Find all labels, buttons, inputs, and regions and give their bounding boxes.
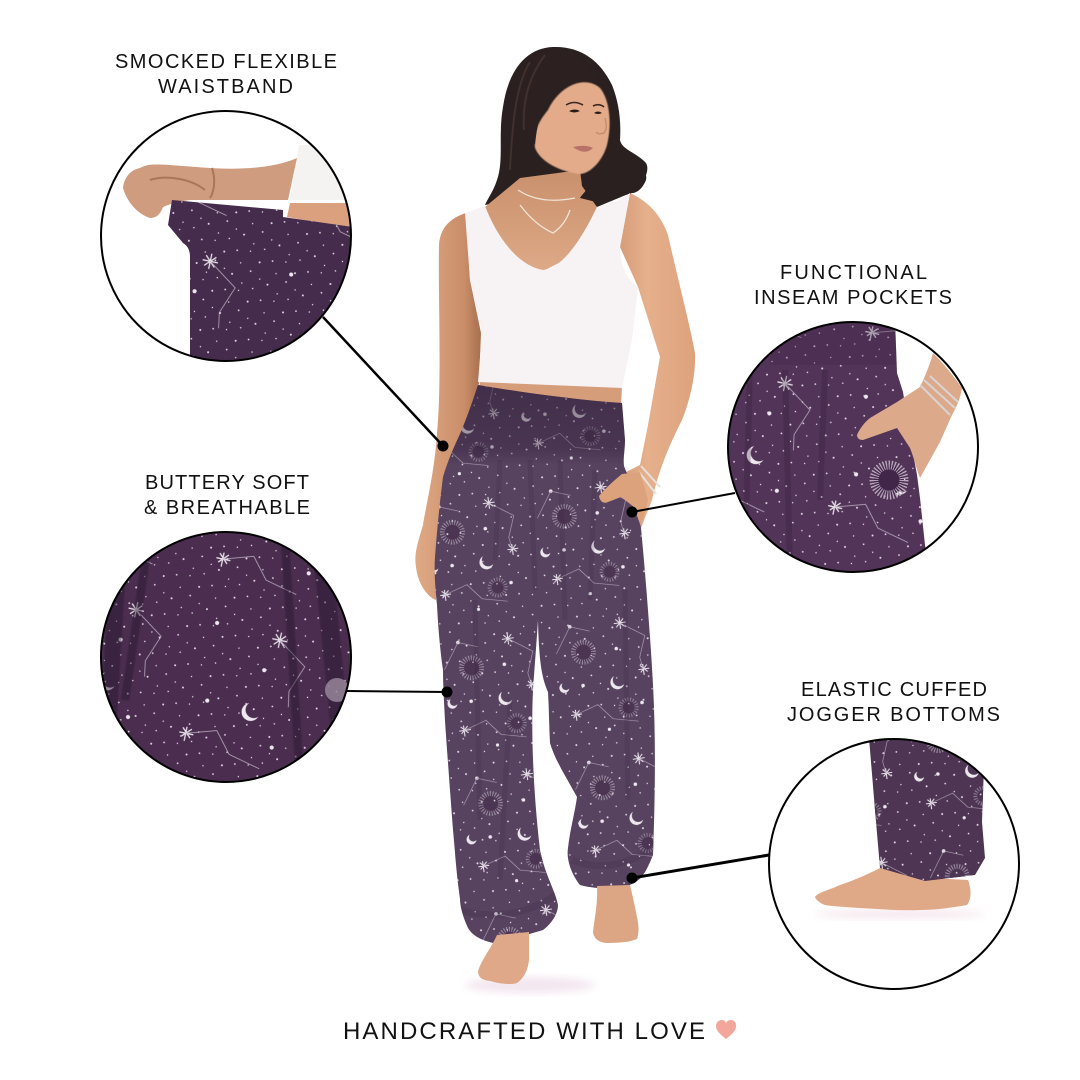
neck and chest xyxy=(485,170,597,271)
leader line: fabric xyxy=(347,686,452,698)
heading: buttery soft and breathable: & BREATHABLE xyxy=(144,497,310,519)
icon: heart xyxy=(716,1020,736,1039)
main figure: woman wearing purple constellation pants xyxy=(415,47,695,993)
heading: functional inseam pockets xyxy=(754,262,952,309)
facial features xyxy=(566,102,606,152)
right arm and hand xyxy=(598,193,695,528)
pant hand overlap xyxy=(599,472,648,527)
floor shadow xyxy=(465,977,595,993)
detail circle: cuff xyxy=(768,738,1020,990)
tagline: HANDCRAFTED WITH LOVE xyxy=(343,1018,705,1045)
heading: smocked flexible waistband: SMOCKED FLEXIBLE xyxy=(115,51,337,73)
leader line: waistband xyxy=(323,317,448,452)
hair back xyxy=(485,47,647,207)
left foot xyxy=(478,932,529,984)
midriff xyxy=(478,380,622,408)
face xyxy=(535,82,610,174)
left arm xyxy=(415,213,481,600)
detail circle: waistband xyxy=(100,110,360,365)
heading: smocked flexible waistband xyxy=(115,51,337,98)
heading: elastic cuffed jogger bottoms: ELASTIC CUFFED xyxy=(801,679,987,701)
hair fringe xyxy=(519,48,600,145)
detail circle: pocket xyxy=(725,320,980,575)
heading: functional inseam pockets: FUNCTIONAL xyxy=(780,262,927,284)
white crop top xyxy=(465,193,638,388)
pants xyxy=(435,385,655,943)
callout: fabric softness xyxy=(100,472,452,782)
heading: buttery soft and breathable: BUTTERY SOFT xyxy=(145,472,309,494)
leader line: cuff xyxy=(626,855,769,884)
heading: elastic cuffed jogger bottoms: JOGGER BOTTOMS xyxy=(787,704,1000,726)
hair highlights xyxy=(510,55,545,170)
right foot xyxy=(593,885,639,943)
heading: smocked flexible waistband: WAISTBAND xyxy=(158,76,293,98)
bracelets xyxy=(639,466,660,494)
detail circle: fabric xyxy=(100,530,352,782)
infographic canvas xyxy=(100,47,1020,1039)
heading: elastic cuffed jogger bottoms xyxy=(787,679,1000,726)
callout: waistband xyxy=(100,51,448,452)
necklaces xyxy=(518,190,575,233)
heading: buttery soft and breathable xyxy=(144,472,310,519)
callout: cuffs xyxy=(626,679,1020,990)
leader line: pocket xyxy=(626,493,735,518)
hair strand over shoulder xyxy=(580,120,646,203)
callout: pockets xyxy=(626,262,980,575)
pants print and shading xyxy=(434,385,655,940)
heading: functional inseam pockets: INSEAM POCKETS xyxy=(754,287,952,309)
